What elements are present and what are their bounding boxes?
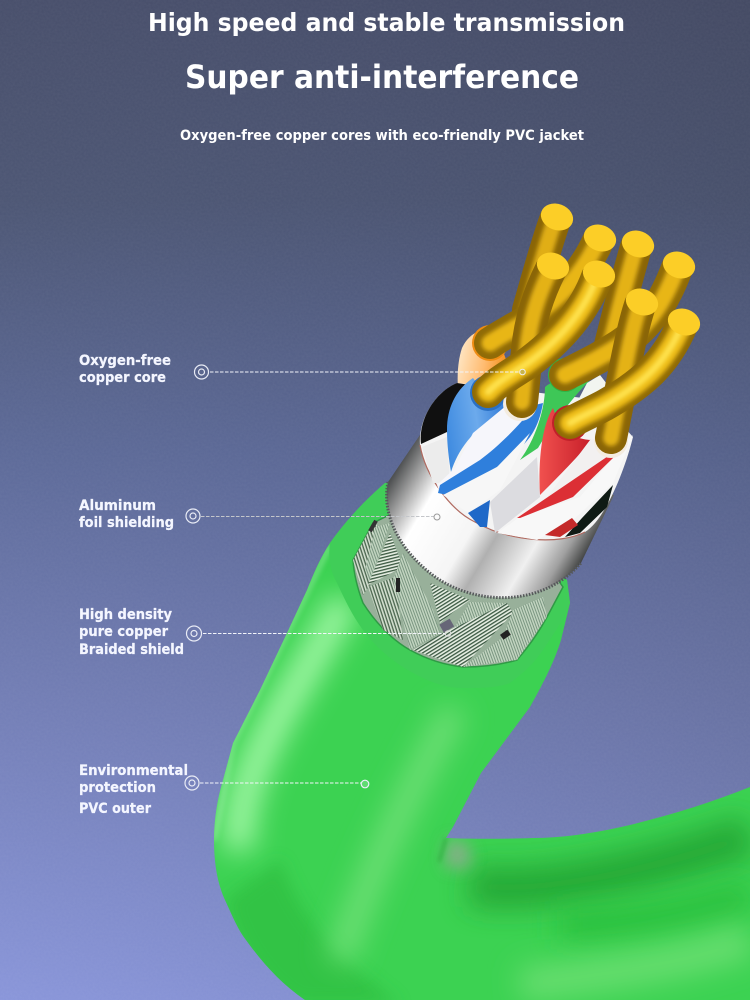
callout: PVC outer: protection [79,780,156,796]
callout: braided shield [79,607,451,658]
callout: aluminum foil: Aluminum [79,498,156,514]
callout: aluminum foil: foil shielding [79,515,174,531]
twisted wire pairs in the foil opening [420,358,633,540]
callout: copper core: Oxygen-free [79,353,171,369]
tagline: Oxygen-free copper cores with eco-friendly PVC jacket [180,128,584,144]
callout: aluminum foil [79,498,440,531]
callout: PVC outer [79,763,369,817]
back gold conductors [490,220,636,345]
callout: PVC outer: PVC outer [79,801,151,817]
gold conductor end caps, back row [537,199,658,262]
title: High speed and stable transmission [148,8,625,37]
callout: PVC outer: Environmental [79,763,188,779]
orange wire insulation [458,325,510,392]
callout: braided shield: High density [79,607,172,623]
subtitle: Super anti-interference [185,58,579,96]
foil shield cylinder [387,432,614,598]
jacket end ring [329,470,570,688]
gold conductor end caps, front row [533,247,704,340]
braided copper shield [353,470,563,667]
front gold conductors [488,268,682,438]
callout: braided shield: Braided shield [79,642,184,658]
callout: copper core: copper core [79,370,166,386]
callout: copper core [79,353,525,386]
callout: braided shield: pure copper [79,624,168,640]
green PVC outer jacket [200,470,750,1000]
